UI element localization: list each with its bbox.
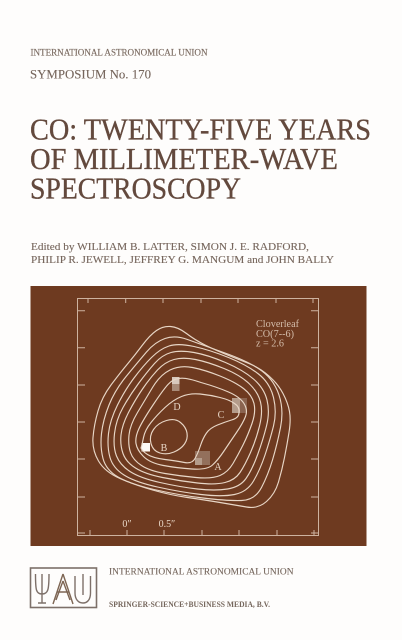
map legend: CO(7--6) (256, 329, 294, 340)
publisher text: SPRINGER-SCIENCE+BUSINESS MEDIA, B.V. (109, 600, 270, 609)
icon: IAU logo (30, 568, 96, 608)
title: CO: TWENTY-FIVE YEARS (30, 112, 371, 146)
panel: contour map (30, 286, 366, 546)
symposium number: SYMPOSIUM No. 170 (30, 68, 151, 82)
editors (31, 241, 334, 266)
map legend: Cloverleaf (256, 319, 300, 330)
plot frame and ticks (78, 298, 318, 536)
component labels: 0.5″ (159, 519, 175, 530)
component labels (122, 402, 225, 530)
component labels: C (218, 410, 225, 421)
organisation line: INTERNATIONAL ASTRONOMICAL UNION (30, 48, 208, 58)
editors: PHILIP R. JEWELL, JEFFREY G. MANGUM and JOHN BALLY (31, 254, 334, 266)
title: SPECTROSCOPY (30, 171, 241, 205)
component labels: A (214, 462, 222, 473)
publisher text (109, 568, 294, 609)
header text block (30, 48, 208, 82)
component labels: B (161, 443, 168, 454)
map legend (256, 319, 300, 350)
publisher text: INTERNATIONAL ASTRONOMICAL UNION (109, 568, 294, 578)
contour lines (93, 326, 290, 507)
image pixels: quasar components (142, 377, 247, 465)
map legend: z = 2.6 (256, 338, 284, 350)
title: OF MILLIMETER-WAVE (30, 142, 338, 176)
component labels: 0″ (122, 519, 132, 530)
title (30, 112, 371, 205)
editors: Edited by WILLIAM B. LATTER, SIMON J. E. RADFORD, (31, 241, 309, 253)
component labels: D (173, 402, 181, 413)
